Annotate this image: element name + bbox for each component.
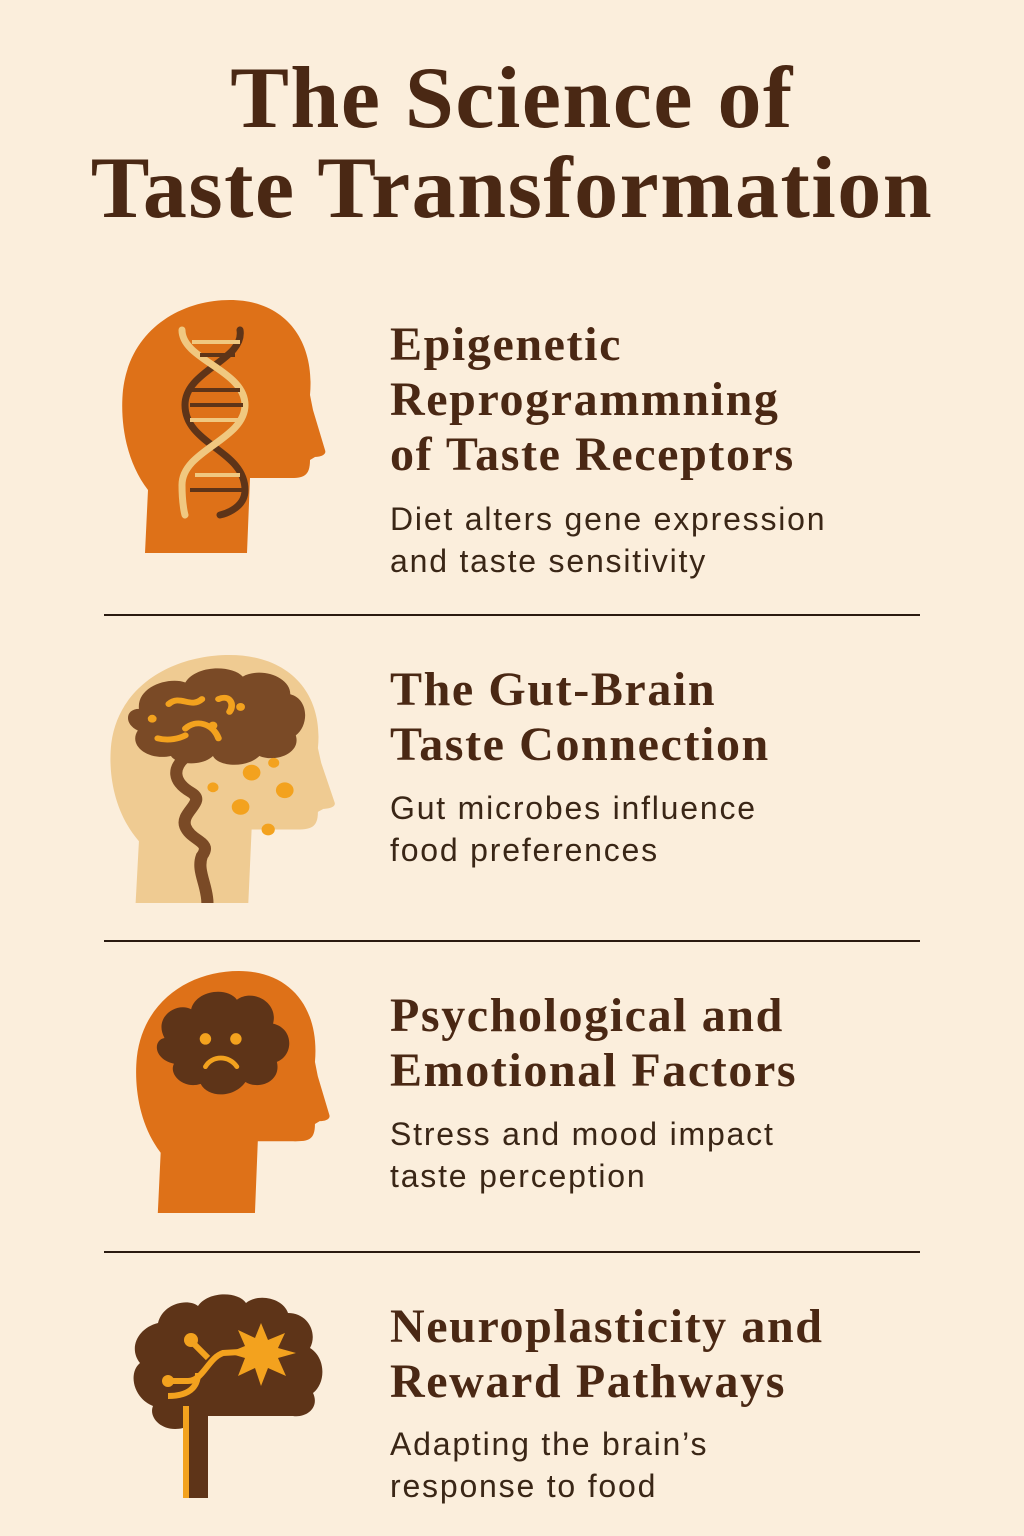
title — [91, 50, 933, 237]
body 4 — [390, 1426, 708, 1504]
body 1: and taste sensitivity — [390, 543, 707, 579]
body 2: food preferences — [390, 832, 659, 868]
body 1: Diet alters gene expression — [390, 501, 826, 537]
heading 1 — [390, 318, 795, 481]
body 2 — [390, 790, 757, 868]
heading 3: Psychological and — [390, 989, 784, 1042]
body 3: taste perception — [390, 1158, 647, 1194]
body 4: Adapting the brain’s — [390, 1426, 708, 1462]
icon: head with gut-brain — [110, 655, 335, 903]
icon: brain with neuron — [134, 1294, 322, 1498]
heading 1: Epigenetic — [390, 318, 622, 371]
body 3: Stress and mood impact — [390, 1116, 775, 1152]
heading 4: Reward Pathways — [390, 1355, 786, 1408]
heading 2: Taste Connection — [390, 718, 770, 771]
heading 3 — [390, 989, 797, 1097]
body 3 — [390, 1116, 775, 1194]
body 1 — [390, 501, 826, 579]
title: The Science of — [230, 50, 794, 147]
title: Taste Transformation — [91, 140, 933, 237]
body 4: response to food — [390, 1468, 657, 1504]
body 2: Gut microbes influence — [390, 790, 757, 826]
icon: head with DNA — [122, 300, 326, 553]
heading 1: of Taste Receptors — [390, 428, 795, 481]
heading 2: The Gut-Brain — [390, 663, 716, 716]
heading 1: Reprogrammning — [390, 373, 780, 426]
heading 3: Emotional Factors — [390, 1044, 797, 1097]
heading 4 — [390, 1300, 824, 1408]
heading 2 — [390, 663, 770, 771]
icon: head with sad cloud — [136, 971, 330, 1213]
heading 4: Neuroplasticity and — [390, 1300, 824, 1353]
